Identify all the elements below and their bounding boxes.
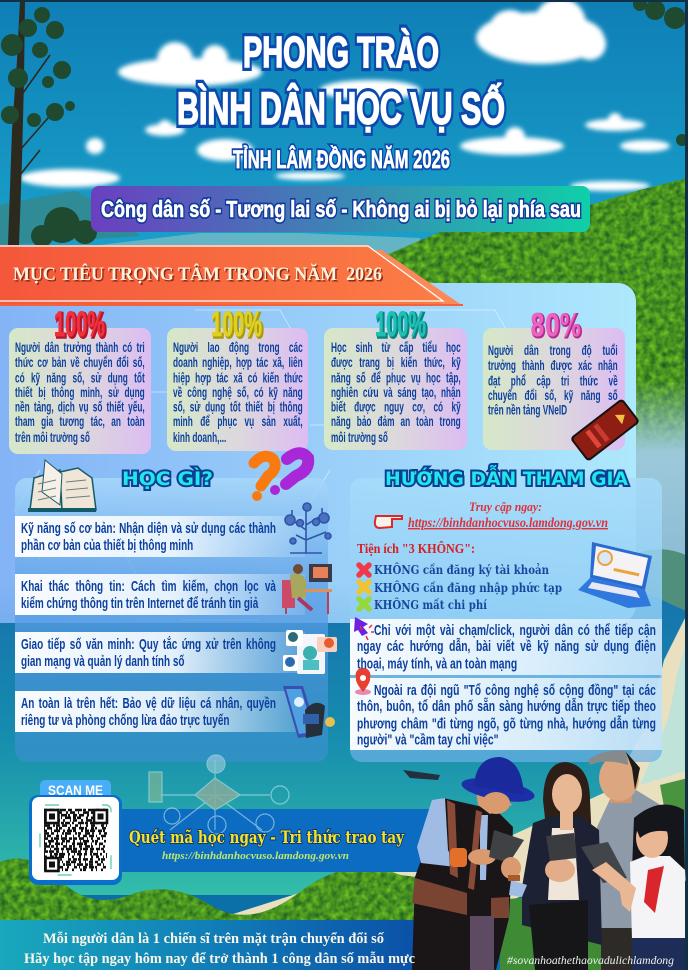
tagline banner <box>91 186 590 232</box>
guide strip 2 <box>350 678 662 750</box>
icon: click cursor <box>354 617 374 640</box>
card 4 text: trên nền tảng VNeID <box>488 402 567 418</box>
row 1 text: Kỹ năng số cơ bản: Nhận diện và sử dụng các thành <box>21 520 276 536</box>
row 4 text: riêng tư và phòng chống lừa đảo trực tuyến <box>21 711 229 728</box>
card 3 text <box>331 339 461 445</box>
heading: Học gì: HỌC GÌ? <box>122 467 213 490</box>
card 2 text: doanh nghiệp, hợp tác xã, liên <box>173 354 303 370</box>
card 3 text: môi trường số <box>331 429 388 444</box>
row 1 text <box>21 520 276 553</box>
stat: 100% teal: 100% <box>375 305 426 344</box>
row 3 text <box>21 636 276 669</box>
footer text: Hãy học tập ngay hôm nay để trở thành 1 công dân số mẫu mực <box>24 951 416 967</box>
icon: question marks <box>252 453 308 501</box>
card 2 text: hiệp hợp tác xã có kiến thức <box>173 369 303 385</box>
benefits list: KHÔNG cần đăng nhập phức tạp <box>374 579 562 595</box>
title: PHONG TRÀO <box>243 27 439 77</box>
benefits list: KHÔNG cần đăng ký tài khoản <box>374 561 549 577</box>
stat: 100% red: 100% <box>56 306 106 346</box>
scan me pill: SCAN ME <box>48 782 103 798</box>
title <box>177 27 505 174</box>
guide text 2: thôn, buôn, tổ dân phố sẵn sàng hướng dẫn trực tiếp theo <box>357 697 656 715</box>
footer text: Mỗi người dân là 1 chiến sĩ trên mặt trận chuyển đổi số <box>43 931 385 947</box>
card 2 text: về công nghệ số, có kỹ năng <box>173 384 303 400</box>
QR code card <box>29 795 122 885</box>
icon: pointing hand <box>375 516 402 528</box>
card 4 text: Người dân trong độ tuổi <box>488 342 618 358</box>
card 2 text: số, sử dụng tốt thiết bị thông <box>173 399 303 415</box>
heading: Hướng dẫn tham gia: HƯỚNG DẪN THAM GIA <box>385 463 628 490</box>
scan me pill <box>40 780 111 804</box>
stat: 100% yellow <box>211 305 264 346</box>
icon: phone VNeID <box>570 398 640 462</box>
person: woman in blazer <box>522 762 602 970</box>
card 3 text: năng bảo đảm an toàn trong <box>331 414 461 430</box>
strip 4 <box>15 691 305 732</box>
row 3 text: gian mạng và quản lý danh tính số <box>21 653 185 669</box>
card 4 text: trưởng thành được xác nhận <box>488 357 618 373</box>
guide text 2: Ngoài ra đội ngũ "Tổ công nghệ số cộng đồng" tại các <box>374 681 656 698</box>
heading banner: mục tiêu: MỤC TIÊU TRỌNG TÂM TRONG NĂM 2026 <box>14 264 384 286</box>
tech illustration <box>149 755 289 834</box>
stat: 80% pink: 80% <box>531 309 582 345</box>
hashtag: #sovanhoathethaovadulichlamdong <box>507 953 674 967</box>
scan title: Quét mã học ngay - Tri thức trao tay <box>129 828 404 847</box>
stat: 100% red: 100% <box>54 305 105 344</box>
card 3 text: được trang bị kiến thức, kỹ <box>331 354 461 370</box>
stat: 100% yellow: 100% <box>211 305 262 344</box>
guide text 1: Chỉ với một vài chạm/click, người dân có thể tiếp cận <box>374 621 656 638</box>
strip 3 <box>15 632 305 673</box>
card 1 text <box>15 339 145 445</box>
stat: 100% red <box>54 305 106 346</box>
guide text 1: thoại, máy tính, và an toàn mạng <box>357 654 517 671</box>
benefits list: KHÔNG mất chi phí <box>374 596 487 612</box>
stat: 80% pink: 80% <box>530 308 581 344</box>
row 2 text: kiểm chứng thông tin trên Internet để tránh tin giả <box>21 594 258 611</box>
stat: 100% teal: 100% <box>376 306 428 346</box>
title: BÌNH DÂN HỌC VỤ SỐ <box>177 83 505 134</box>
card 3 text: năng số để phục vụ học tập, <box>331 369 461 385</box>
strip 1 <box>15 516 305 557</box>
title: TỈNH LÂM ĐỒNG NĂM 2026 <box>233 144 450 174</box>
card 3 text: Học sinh từ cấp tiểu học <box>331 339 461 355</box>
card 2 text: Người lao động trong các <box>173 339 303 355</box>
target card 3 <box>324 328 467 450</box>
icon: digital tree <box>285 503 331 553</box>
target card 1 <box>9 328 151 454</box>
title: PHONG TRÀO <box>243 27 439 77</box>
card 1 text: thiết bị thông minh, sử dụng <box>15 384 145 400</box>
row 2 text: Khai thác thông tin: Cách tìm kiếm, chọn lọc và <box>21 578 276 594</box>
stat: 80% pink <box>530 308 582 345</box>
row 4 text: An toàn là trên hết: Bảo vệ dữ liệu cá nhân, quyền <box>21 694 276 711</box>
target card 4 <box>483 328 625 450</box>
person: man <box>588 750 686 970</box>
icon: phone scam <box>283 686 335 738</box>
card 2 text: minh để phục vụ sản xuất, <box>173 414 303 430</box>
icon: red cross <box>359 565 369 575</box>
strip 2 <box>15 574 305 615</box>
heading banner: mục tiêu <box>0 245 463 306</box>
card 4 text <box>488 342 618 418</box>
footer band <box>0 920 446 970</box>
card 3 text: biết được nguy cơ, có kỹ <box>331 399 461 415</box>
title: BÌNH DÂN HỌC VỤ SỐ <box>177 83 505 134</box>
card 2 text <box>173 339 303 444</box>
card 1 text: trên môi trường số <box>15 429 90 444</box>
icon: green cross <box>359 599 369 609</box>
heading banner: mục tiêu: MỤC TIÊU TRỌNG TÂM TRONG NĂM 2026 <box>13 263 382 285</box>
icon: laptop browser <box>578 542 652 608</box>
people illustration <box>412 750 686 970</box>
card 1 text: có kỹ năng số, sử dụng tốt <box>15 369 145 385</box>
website link: https://binhdanhocvuso.lamdong.gov.vn <box>408 516 608 531</box>
icon: yellow cross <box>359 582 369 592</box>
icon: open book <box>28 460 96 512</box>
card 4 text: chuyển đổi số, kỹ năng số <box>488 387 618 403</box>
card 1 text: thức cơ bản về chuyển đổi số, <box>15 354 145 370</box>
card 1 text: Người dân trưởng thành có tri <box>15 339 145 355</box>
stat: 100% yellow: 100% <box>212 306 264 346</box>
guide text 1: ngay các hướng dẫn, bài viết về kỹ năng sử dụng điện <box>357 637 656 655</box>
row 1 text: phần cơ bản của thiết bị thông minh <box>21 536 193 553</box>
benefits list <box>374 561 562 612</box>
guide text 2: người" và "cầm tay chỉ việc" <box>357 730 499 748</box>
card 1 text: nền tảng, dịch vụ số thiết yếu, <box>15 399 145 415</box>
card 3 text: nghiên cứu và sáng tạo, nhận <box>331 384 461 400</box>
guide text 2 <box>357 681 656 748</box>
scan band <box>118 809 430 872</box>
card 1 text: tham gia tương tác, an toàn <box>15 414 145 430</box>
panel: Hướng dẫn tham gia <box>350 478 662 762</box>
icon: map pin <box>355 668 371 695</box>
card 4 text: đạt phổ cập tri thức về <box>488 372 618 388</box>
icon: social network people <box>283 630 337 674</box>
panel: Học gì <box>15 478 328 762</box>
row 3 text: Giao tiếp số văn minh: Quy tắc ứng xử trên không <box>21 636 276 652</box>
icon: person at desk <box>282 564 332 614</box>
card 2 text: kinh doanh,... <box>173 429 226 444</box>
truy cập ngay: Truy cập ngay: <box>469 499 542 514</box>
guide text 1 <box>357 621 656 672</box>
person: girl student <box>581 805 685 970</box>
row 2 text <box>21 578 276 611</box>
scan link: https://binhdanhocvuso.lamdong.gov.vn <box>162 850 349 862</box>
main target panel background <box>0 24 662 762</box>
stat: 100% teal <box>375 305 428 346</box>
benefits heading: Tiện ích "3 KHÔNG": <box>357 541 475 556</box>
target card 2 <box>167 328 308 451</box>
title: TỈNH LÂM ĐỒNG NĂM 2026 <box>233 144 450 174</box>
guide text 2: phương châm "đi từng ngõ, gõ từng nhà, hướng dẫn từng <box>357 714 656 731</box>
row 4 text <box>21 694 276 728</box>
guide strip 1 <box>350 619 662 675</box>
boat <box>403 770 440 780</box>
footer text <box>24 931 416 967</box>
person: woman in hat <box>412 757 536 970</box>
